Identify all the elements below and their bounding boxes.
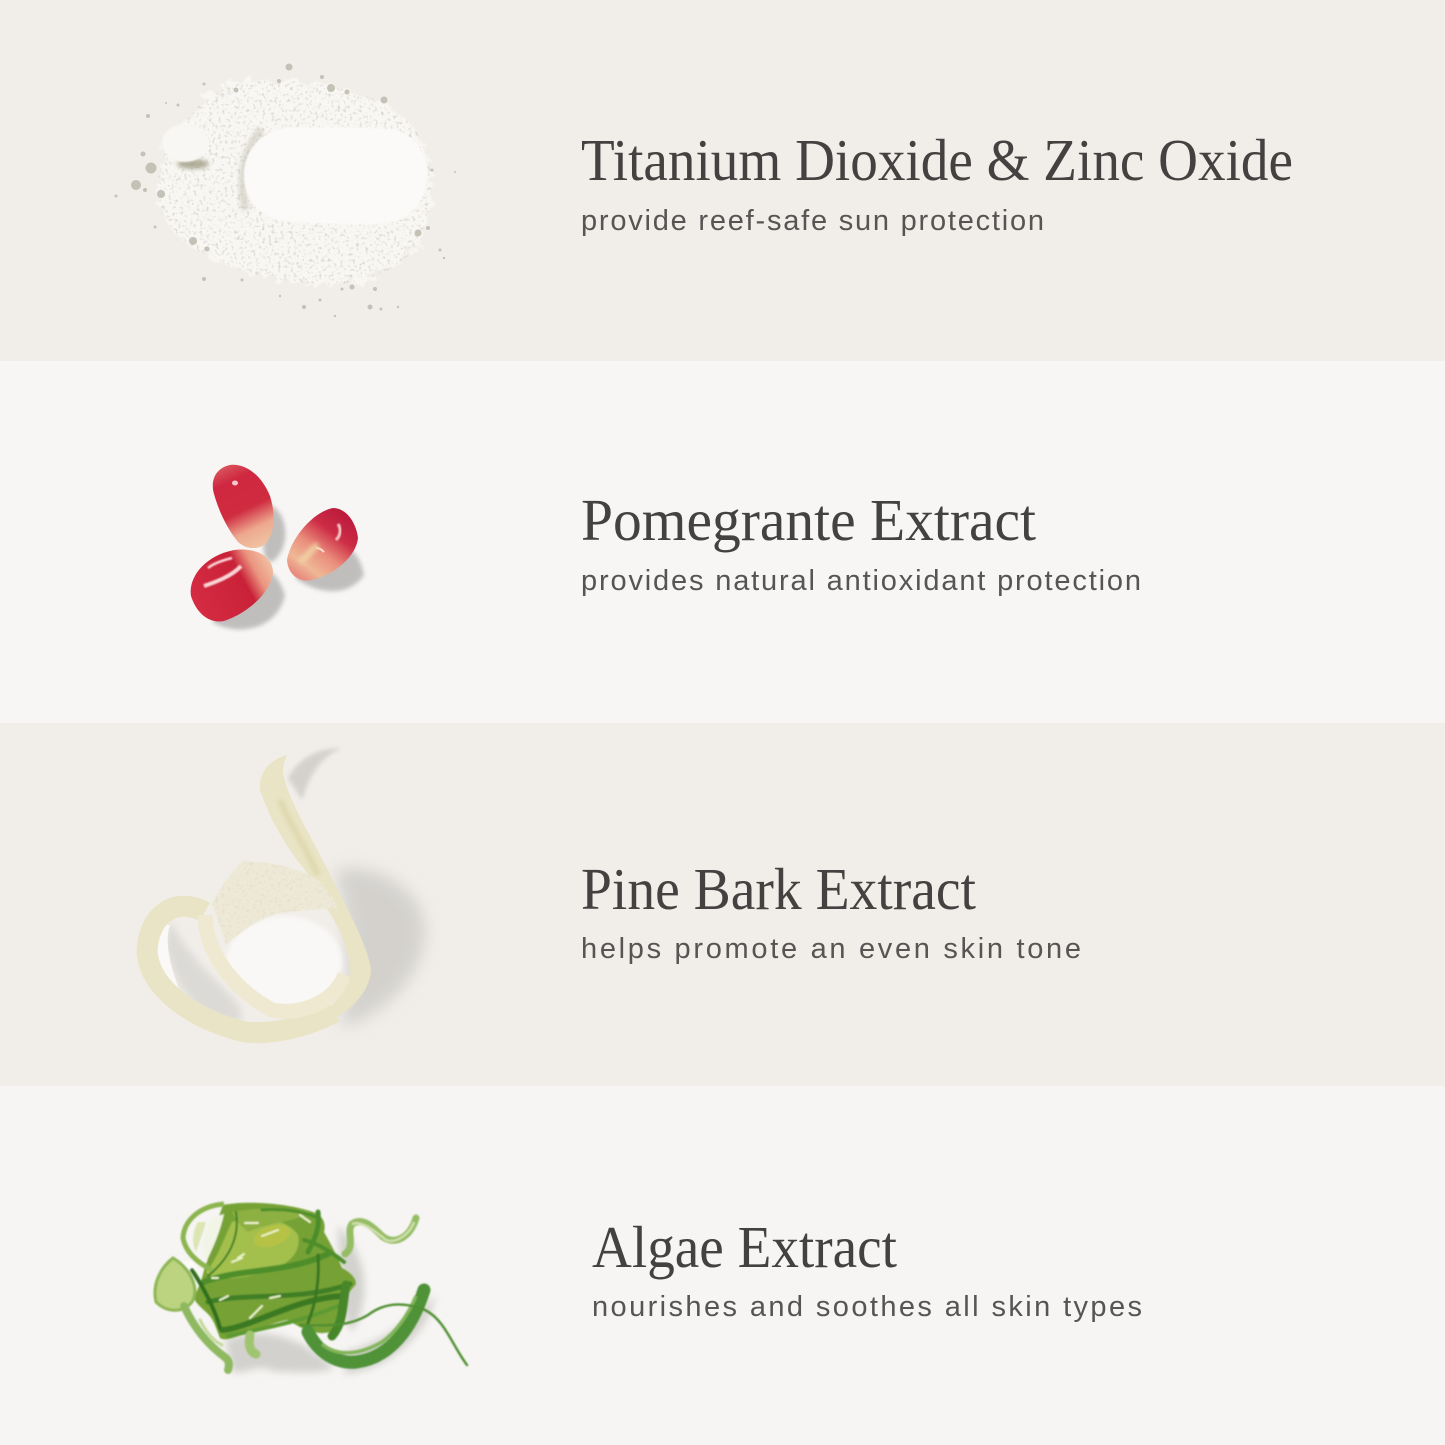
mid green strands <box>192 1209 350 1336</box>
image: powder ring <box>114 64 456 317</box>
panel: pomegranate extract <box>0 361 1445 723</box>
seed top <box>213 465 274 548</box>
top left loop <box>183 1204 224 1270</box>
scattered powder grains <box>114 64 456 317</box>
powder lump <box>162 124 209 169</box>
seed right <box>287 508 358 581</box>
description: provides natural antioxidant protection <box>581 565 1141 597</box>
title: Algae Extract <box>592 1214 898 1280</box>
glossy highlights <box>212 1215 310 1318</box>
bright centre <box>226 916 342 1008</box>
image: pine bark ribbon <box>147 748 425 1033</box>
image: pomegranate seeds <box>191 465 364 629</box>
panel: pine bark extract <box>0 723 1445 1086</box>
left lobe <box>155 1258 195 1310</box>
lower left strands <box>184 1306 256 1370</box>
panel: titanium dioxide and zinc oxide <box>0 0 1445 361</box>
textured bark patch <box>212 861 338 945</box>
thin right tendril <box>300 1305 467 1365</box>
ribbon shadows <box>165 748 425 1028</box>
algae shadows <box>225 1225 436 1374</box>
title: Pine Bark Extract <box>581 856 977 922</box>
panel: algae extract <box>0 1086 1445 1445</box>
ribbon main strand <box>260 755 371 1023</box>
algae mass <box>155 1203 467 1370</box>
ribbon inner loop <box>205 915 345 1011</box>
ribbon outer loop <box>147 906 335 1033</box>
lower right strand <box>308 1290 424 1362</box>
description: helps promote an even skin tone <box>581 933 1081 965</box>
title: Titanium Dioxide & Zinc Oxide <box>581 127 1293 193</box>
main mass <box>194 1203 356 1339</box>
image: algae <box>155 1203 467 1374</box>
inner shading <box>243 130 262 210</box>
seed bottom <box>191 550 273 621</box>
description: nourishes and soothes all skin types <box>592 1291 1142 1323</box>
title: Pomegrante Extract <box>581 487 1037 553</box>
pale translucent leaf <box>206 1218 299 1278</box>
top right curl <box>345 1218 416 1254</box>
hole in the powder <box>244 127 427 224</box>
description: provide reef-safe sun protection <box>581 205 1044 237</box>
